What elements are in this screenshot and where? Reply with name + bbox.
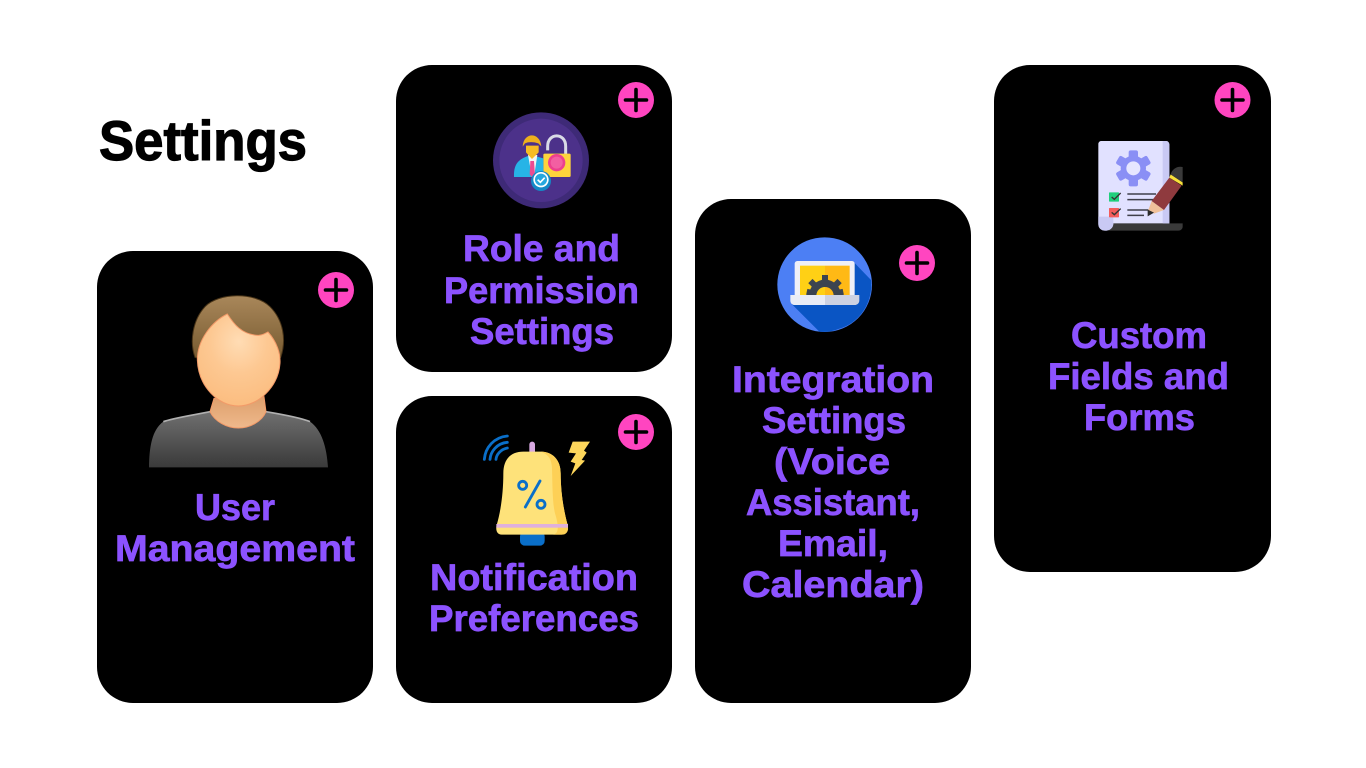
icon: role and lock	[493, 112, 589, 208]
plus button	[618, 82, 654, 118]
panel: role and permission settings	[396, 65, 672, 372]
label: User	[195, 487, 275, 528]
label	[444, 228, 639, 352]
panel: custom fields and forms	[994, 65, 1271, 572]
label: Calendar)	[742, 564, 924, 605]
icon: bell	[484, 436, 590, 546]
panel: user management	[97, 251, 373, 703]
label: Permission	[444, 270, 639, 311]
label	[115, 487, 355, 569]
icon: form and pencil	[1098, 141, 1183, 231]
label	[732, 359, 934, 605]
label: Integration	[732, 359, 934, 400]
label: Role and	[463, 228, 620, 269]
label: Settings	[762, 400, 906, 441]
panel: notification preferences	[396, 396, 672, 703]
label: Custom	[1071, 315, 1207, 356]
icon: person	[149, 296, 328, 467]
label: Assistant,	[746, 482, 920, 523]
label: Email,	[778, 523, 888, 564]
label: Preferences	[429, 598, 639, 639]
panel: integration settings	[695, 199, 971, 703]
plus button	[1214, 82, 1250, 118]
icon: laptop gear	[777, 237, 872, 332]
label	[429, 557, 639, 639]
label: Forms	[1084, 397, 1195, 438]
label: Fields and	[1048, 356, 1229, 397]
title: Settings	[99, 109, 307, 172]
plus button	[899, 245, 935, 281]
label	[1048, 315, 1229, 438]
label: Management	[115, 528, 355, 569]
plus button	[318, 272, 354, 308]
plus button	[618, 414, 654, 450]
label: (Voice	[774, 441, 890, 482]
label: Notification	[430, 557, 638, 598]
label: Settings	[470, 311, 614, 352]
